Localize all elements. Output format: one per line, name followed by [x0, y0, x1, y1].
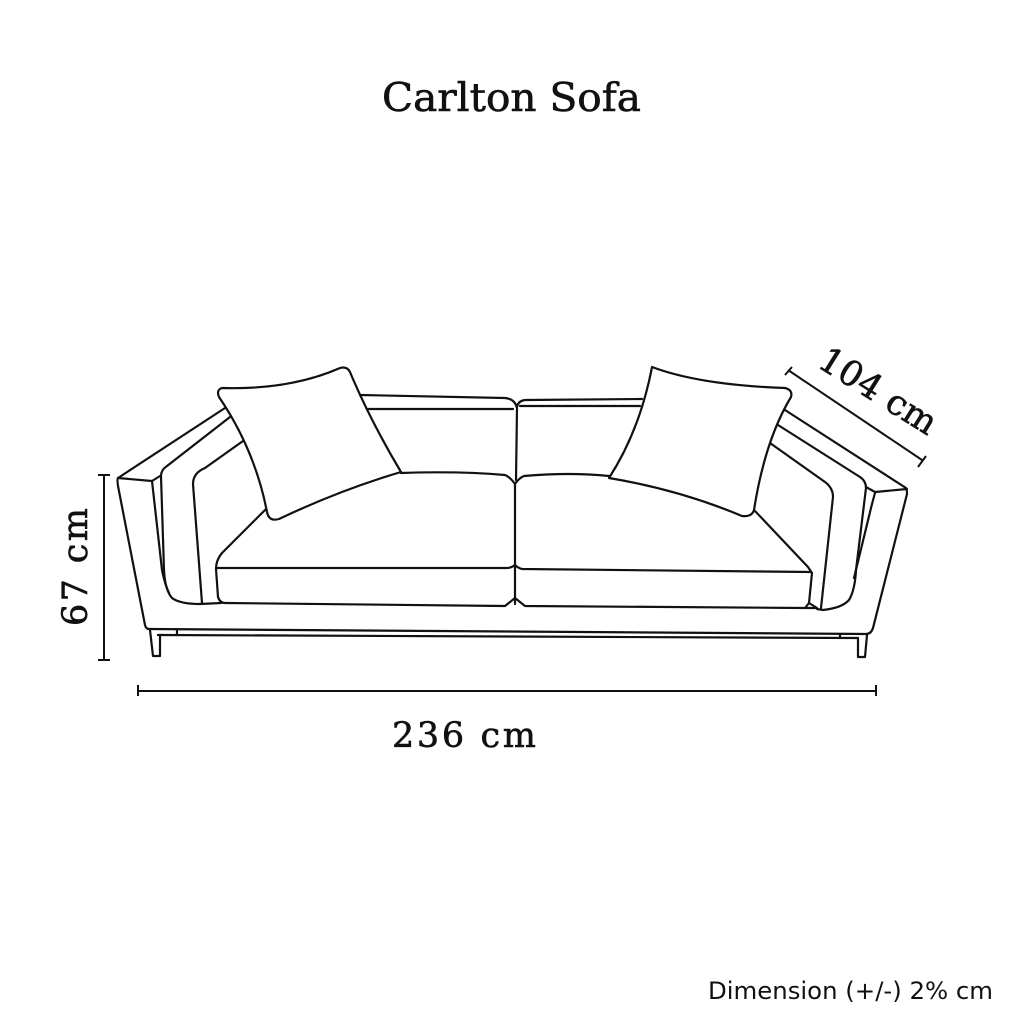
width label: 236 cm [392, 716, 536, 756]
base frame and legs [148, 629, 867, 657]
right pillow [609, 367, 791, 516]
tolerance note: Dimension (+/-) 2% cm [708, 977, 993, 1005]
dimension: width [138, 685, 876, 696]
dimension: height [98, 475, 110, 660]
seat cushions [216, 472, 817, 608]
depth label: 104 cm [811, 340, 944, 444]
sofa line drawing [118, 367, 907, 657]
left arm [118, 408, 243, 629]
height label: 67 cm [56, 508, 96, 626]
back cushions [360, 395, 642, 480]
dimension: depth [785, 367, 926, 467]
right arm [770, 410, 907, 634]
left pillow [218, 368, 401, 520]
title: Carlton Sofa [382, 76, 641, 121]
